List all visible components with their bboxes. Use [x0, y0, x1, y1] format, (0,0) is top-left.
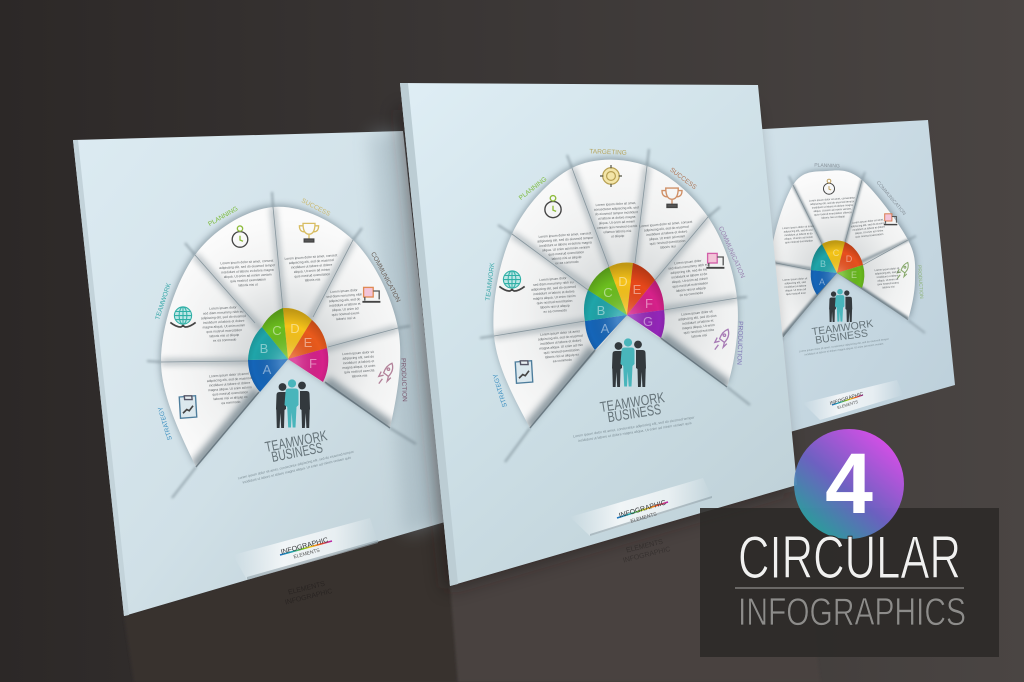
left text blocks: quis nostrud exerci: [332, 311, 360, 317]
left text blocks: quis nostrud exercitation: [212, 390, 248, 397]
left text blocks: Lorem ipsum dolor sit amet, consect: [220, 259, 274, 265]
panel: centre sheet: [398, 83, 797, 590]
right text blocks: [782, 195, 902, 296]
centre labels: COMMUNICATION: [717, 225, 746, 280]
right text blocks: adipiscing elit, sed do eiusmod: [850, 221, 887, 228]
left badge strip: ELEMENTS: [293, 547, 321, 560]
centre text blocks: ut aliquip: [611, 234, 624, 239]
left colour hub: D: [290, 321, 300, 336]
centre colour hub: [584, 262, 665, 350]
left people icon: [276, 379, 310, 428]
centre text blocks: Lorem ipsum dolor: [539, 276, 568, 282]
left text blocks: incididunt ut labore et: [343, 359, 374, 365]
right text blocks: adipiscing elit, sed do eiu: [784, 228, 813, 234]
centre text blocks: ea commodo: [553, 358, 572, 363]
centre text blocks: magna aliqua. Ut enim ad min: [539, 343, 583, 351]
left icons: [170, 223, 393, 418]
centre text blocks: aliqua. Ut enim ad minim: [649, 234, 686, 241]
centre description: Lorem ipsum dolor sit amet, consectetur adipiscing elit, sed do eiusmod tempor: [573, 415, 696, 439]
left badge strip: INFOGRAPHIC: [280, 537, 329, 556]
centre text blocks: incididunt ut labore et dolore magna: [539, 240, 592, 248]
centre text blocks: magna aliqua. Ut enim minim: [533, 294, 576, 301]
centre text blocks: adipiscing elit, sed do eiusmod: [531, 285, 576, 292]
right text blocks: incididunt ut labore: [784, 283, 807, 289]
left text blocks: laboris nisi: [305, 277, 321, 282]
right text blocks: aliqua. Ut enim ad minim: [784, 235, 813, 241]
centre text blocks: Lorem ipsum dolor sit: [681, 309, 713, 317]
left disc segments: [147, 192, 416, 498]
left text blocks: aliqua. Ut enim ad: [332, 306, 359, 312]
centre heading: [599, 390, 666, 426]
floor reflections: ELEMENTS: [287, 581, 326, 597]
centre text blocks: ullamco laboris nisi: [603, 229, 632, 234]
left text blocks: quis nostrud exercitation: [206, 328, 242, 334]
left text blocks: magna aliqua. Ut enim: [342, 364, 376, 370]
centre badge strip: INFOGRAPHIC: [618, 499, 667, 520]
right colour hub: E: [851, 270, 857, 280]
centre labels: [485, 148, 746, 408]
right colour hub: B: [820, 259, 826, 269]
left text blocks: incididunt ut labore et dolore: [203, 319, 245, 325]
panel: right sheet: [745, 120, 955, 432]
centre text blocks: ut labore et dolore magna: [598, 215, 636, 221]
right text blocks: aliqua. Ut enim ad minim: [855, 228, 883, 235]
centre text blocks: quis nostrud exercitation: [544, 348, 580, 355]
left labels: PRODUCTION: [399, 358, 408, 402]
title box: [700, 508, 999, 657]
right disc shadow: [771, 169, 916, 336]
centre text blocks: laboris nisi ut aliquip: [676, 286, 706, 293]
left labels: STRATEGY: [157, 405, 174, 441]
right labels: PRODUCTION: [916, 265, 924, 299]
right badge strip: INFOGRAPHIC: [829, 391, 865, 407]
right text blocks: incididunt ut labore et do: [784, 231, 813, 237]
left heading: [264, 428, 329, 466]
centre badge strip: ELEMENTS: [630, 511, 658, 525]
right text blocks: Lorem ipsum dolor sit: [874, 266, 900, 272]
centre colour hub: F: [645, 296, 653, 311]
right text blocks: laboris nisi: [882, 284, 895, 289]
left badge strip: [233, 518, 378, 580]
centre text blocks: laboris nisi: [691, 333, 708, 339]
right text blocks: Lorem ipsum dolor sit: [782, 276, 808, 282]
left colour hub: F: [309, 356, 317, 371]
left description: Lorem ipsum dolor sit amet, consectetur adipiscing elit, sed do eiusmod tempor: [237, 450, 355, 480]
right text blocks: incididunt ut labore et dolore magna: [812, 203, 854, 210]
centre text blocks: magna aliqua. Ut enim: [682, 323, 715, 330]
centre text blocks: quis nostrud exercitation: [537, 299, 573, 305]
centre text blocks: sed diam nonummy nibh eu: [668, 262, 709, 271]
centre text blocks: Lorem ipsum dolor sit amet, consect: [538, 231, 592, 239]
centre text blocks: laboris nisi ut aliquip ex: [545, 352, 579, 359]
right icons: [823, 179, 908, 279]
left labels: PLANNING: [207, 205, 239, 228]
centre text blocks: Lorem ipsum dolor: [674, 258, 703, 265]
centre text blocks: quis nostrud exercitation: [548, 250, 584, 257]
left disc shadow: [160, 205, 399, 465]
left text blocks: [200, 253, 376, 406]
right text blocks: adipiscing elit, sed do: [875, 269, 900, 276]
centre text blocks: incididunt ut labore et: [682, 319, 714, 326]
centre text blocks: laboris nisi ut aliquip: [552, 255, 582, 261]
right text blocks: aliqua. Ut enim ad: [785, 287, 807, 293]
centre text blocks: Lorem ipsum dolor sit amet,: [596, 201, 636, 207]
floor reflections: INFOGRAPHIC: [622, 546, 671, 565]
centre text blocks: aliqua. Ut enim ad minim: [599, 219, 635, 225]
centre colour hub: A: [601, 321, 610, 336]
left description: incididunt ut labore et dolore magna aliqua. Ut enim ad minim veniam quis: [242, 456, 352, 484]
centre text blocks: laboris nisi: [660, 244, 676, 250]
centre text blocks: sed diam nonummy nibh eu: [533, 280, 574, 287]
left heading: TEAMWORK: [264, 428, 329, 456]
right people icon: [829, 289, 852, 322]
right heading: BUSINESS: [814, 327, 869, 347]
centre colour hub: C: [603, 285, 613, 300]
right text blocks: Lorem ipsum dolor sit amet: [782, 224, 814, 230]
right labels: [814, 163, 924, 299]
left text blocks: incididunt ut labore et dolore: [209, 381, 251, 388]
left text blocks: adipiscing elit, sed do eiusmod tempor: [219, 263, 276, 270]
centre text blocks: ex ea commodo: [543, 308, 567, 314]
left text blocks: sed diam nonummy nibh eu: [203, 310, 244, 316]
left colour hub: C: [272, 323, 282, 338]
centre text blocks: Lorem ipsum dolor sit amet, consect: [639, 220, 693, 228]
centre text blocks: adipiscing elit, sed do eiusmod: [538, 334, 583, 342]
floor reflections: ELEMENTS: [625, 539, 664, 555]
left text blocks: Lorem ipsum dolor: [330, 288, 359, 294]
left text blocks: laboris nisi ut: [238, 282, 258, 287]
right disc segments: [770, 170, 925, 345]
left text blocks: laboris nisi ut aliquip ex: [213, 395, 248, 401]
left colour hub: A: [263, 362, 272, 377]
right text blocks: quis nostrud exer: [786, 291, 806, 296]
right heading: TEAMWORK: [811, 318, 874, 338]
left text blocks: laboris nisi: [352, 373, 368, 378]
badge circle with number 4: [794, 429, 904, 539]
right description: Lorem ipsum dolor sit amet, consectetur adipiscing elit, sed do eiusmod tempor: [799, 337, 889, 353]
centre text blocks: do eiusmod tempor incididunt: [595, 210, 638, 216]
centre description: incididunt ut labore et dolore magna aliqua. Ut enim ad minim veniam quis: [578, 421, 692, 443]
left text blocks: incididunt ut labore et dolore: [291, 263, 333, 270]
centre text blocks: aliqua. Ut enim ad minim veniam: [542, 245, 590, 252]
left text blocks: Lorem ipsum dolor sit amet: [209, 372, 249, 378]
left text blocks: Lorem ipsum dolor: [209, 305, 238, 311]
right text blocks: quis nostrud exercitation: [855, 232, 884, 239]
right colour hub: C: [833, 248, 840, 258]
left labels: TEAMWORK: [154, 282, 173, 321]
badge circle with number 4: 4: [825, 436, 873, 532]
centre labels: STRATEGY: [492, 372, 509, 408]
centre text blocks: veniam quis nostrud exercit: [597, 224, 637, 230]
centre text blocks: adipiscing elit, sed do eius: [678, 314, 717, 322]
left text blocks: adipiscing elit, sed do eiusmod: [201, 314, 246, 320]
right text blocks: quis nostrud exercitation ullamco: [814, 210, 852, 217]
centre colour hub: D: [618, 274, 628, 289]
centre text blocks: Lorem ipsum dolor sit amet: [540, 329, 580, 337]
centre text blocks: adipiscing elit, sed do eiusmod: [644, 225, 689, 233]
right text blocks: laboris nisi ut aliquip: [821, 214, 846, 220]
centre text blocks: adipiscing elit, sed do eiusmod tempor: [537, 236, 594, 244]
centre text blocks: incididunt ut labore et dolore: [646, 229, 688, 237]
left labels: COMMUNICATION: [369, 251, 402, 304]
centre icons: [499, 165, 729, 383]
left text blocks: adipiscing elit, sed do: [329, 297, 361, 303]
centre text blocks: laboris nisi ut aliquip: [540, 303, 570, 310]
centre labels: SUCCESS: [668, 167, 698, 191]
right colour hub: D: [846, 254, 853, 264]
left text blocks: aliqua. Ut enim ad minim veniam: [224, 273, 272, 279]
centre heading: BUSINESS: [606, 402, 662, 426]
left text blocks: incididunt ut labore et dolore magna: [221, 268, 274, 275]
left colour hub: B: [260, 341, 268, 356]
centre text blocks: aliqua. Ut enim ad minim: [672, 276, 708, 284]
left text blocks: magna aliqua. Ut enim ad min: [208, 385, 252, 392]
right colour hub: [811, 240, 864, 295]
floor reflections: [124, 485, 820, 682]
right text blocks: aliqua. Ut enim ad minim veniam,: [813, 206, 852, 213]
left colour hub: E: [304, 335, 313, 350]
centre text blocks: incididunt ut labore et dolore: [540, 338, 582, 346]
centre text blocks: ex ea commodo: [555, 260, 579, 265]
centre text blocks: quis nostrud exercitation: [672, 281, 708, 289]
left text blocks: aliqua. Ut enim ad minim: [294, 267, 330, 274]
centre labels: PRODUCTION: [735, 321, 744, 365]
left text blocks: adipiscing elit, sed do eiusmod: [207, 376, 252, 383]
centre labels: TARGETING: [589, 148, 627, 157]
centre text blocks: ex ea commodo: [679, 291, 703, 297]
panel: left sheet: [73, 131, 445, 616]
centre text blocks: quis nostrud exercitation: [650, 239, 686, 246]
left text blocks: sed diam nonummy nibh: [326, 292, 362, 299]
right text blocks: Lorem ipsum dolor sit amet,: [852, 217, 884, 225]
left text blocks: laboris nisi ut aliquip: [209, 333, 239, 338]
centre disc shadow: [493, 158, 738, 426]
left text blocks: Lorem ipsum dolor sit amet, consect: [284, 253, 338, 261]
left labels: [154, 197, 408, 441]
left text blocks: incididunt ut labore et: [329, 302, 361, 308]
floor reflections: INFOGRAPHIC: [284, 588, 333, 607]
left text blocks: quis nostrud exercitation: [230, 277, 266, 283]
right text blocks: adipiscing elit, sed: [784, 280, 806, 285]
right text blocks: quis nostrud exercitation: [785, 238, 814, 244]
right description: incididunt ut labore et dolore magna aliqua. Ut enim ad minim veniam: [804, 341, 884, 357]
left text blocks: ea commodo: [221, 400, 241, 405]
right text blocks: aliqua. Ut enim ad: [877, 277, 899, 283]
right text blocks: incididunt ut labore et dolore: [852, 224, 886, 232]
centre disc segments: [480, 149, 750, 462]
centre heading: TEAMWORK: [599, 390, 666, 416]
centre text blocks: quis nostrud exercita: [683, 328, 714, 335]
right labels: COMMUNICATION: [875, 180, 907, 217]
centre text blocks: consectetur adipiscing elit, sed: [594, 205, 639, 212]
left text blocks: adipiscing elit, sed do: [342, 354, 374, 361]
centre people icon: [612, 338, 646, 387]
centre colour hub: E: [633, 282, 642, 297]
centre labels: PLANNING: [518, 176, 548, 202]
right labels: PLANNING: [814, 163, 840, 169]
left text blocks: quis nostrud exercitation: [294, 272, 330, 279]
centre text blocks: adipiscing elit, sed do eiu: [670, 267, 708, 275]
right text blocks: Lorem ipsum dolor sit amet, consectetur: [809, 195, 855, 203]
right badge strip: [803, 380, 903, 420]
left text blocks: Lorem ipsum dolor sit: [342, 350, 374, 356]
right text blocks: adipiscing elit, sed do eiusmod tempor: [810, 199, 854, 206]
left labels: SUCCESS: [300, 197, 332, 218]
left text blocks: laboris nisi ut: [336, 316, 356, 321]
centre labels: TEAMWORK: [485, 262, 496, 301]
right colour hub: A: [819, 277, 825, 287]
left text blocks: ex ea commodo: [213, 338, 237, 343]
left text blocks: adipiscing elit, sed do eiusmod: [289, 258, 334, 265]
centre text blocks: [530, 201, 719, 364]
left colour hub: [248, 308, 328, 392]
right text blocks: quis nostrud exerci: [877, 280, 900, 286]
centre colour hub: B: [597, 303, 605, 318]
centre colour hub: G: [643, 314, 653, 329]
centre badge strip: [570, 478, 712, 536]
left text blocks: magna aliqua. Ut enim minim: [202, 323, 246, 329]
centre text blocks: incididunt ut labore et do: [671, 272, 708, 280]
right text blocks: incididunt ut labore: [877, 273, 899, 279]
right badge strip: ELEMENTS: [837, 399, 859, 410]
centre text blocks: incididunt ut labore et dolore: [533, 289, 575, 296]
left heading: BUSINESS: [270, 440, 324, 466]
left text blocks: quis nostrud exercita: [344, 368, 375, 374]
